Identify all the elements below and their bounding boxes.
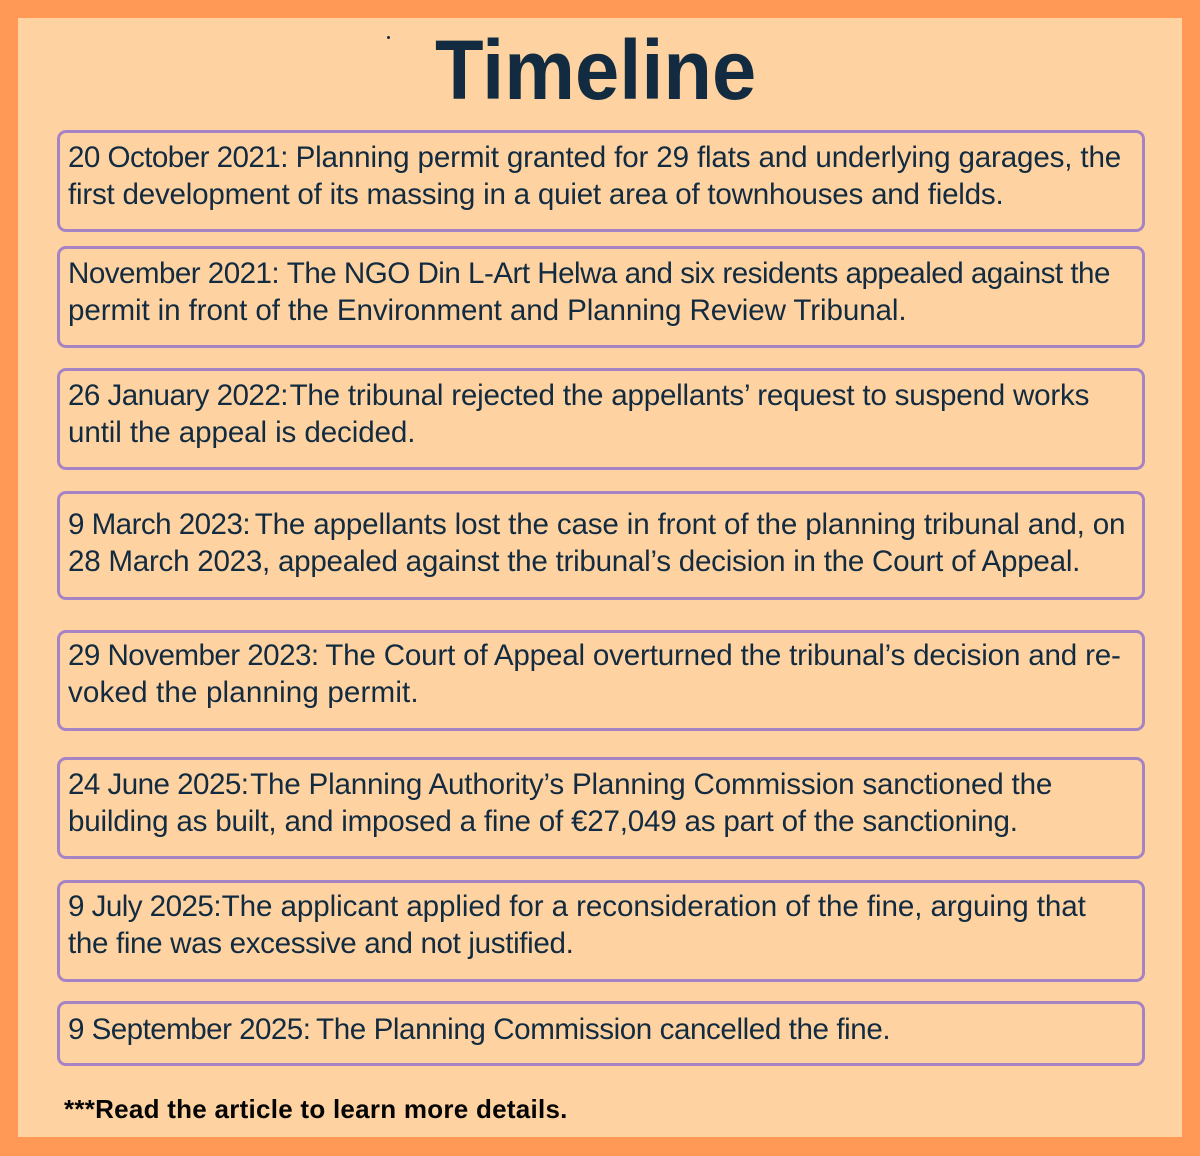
entry text: 9 March 2023: 28 March 2023, appealed against the tribunal’s decision in the Court of Appeal. — [68, 545, 1080, 578]
entry text: 29 November 2023: voked the planning permit. — [68, 676, 419, 709]
entry text: 24 June 2025: building as built, and imposed a fine of €27,049 as part of the sanctioning. — [68, 805, 1018, 838]
entry text: 24 June 2025: 24 June 2025: The Planning Authority’s Planning Commission sanctioned the — [68, 768, 1052, 801]
entry text: 9 July 2025: the fine was excessive and not justified. — [68, 927, 573, 960]
entry text: 9 March 2023 — [68, 508, 1125, 578]
timeline entry box: 20 October 2021 — [57, 130, 1145, 232]
timeline entry box: 9 September 2025 — [57, 1001, 1145, 1066]
entry text: 20 October 2021: 20 October 2021: Planning permit granted for 29 flats and underlying garages, the — [68, 141, 1121, 174]
timeline entry box: 9 July 2025 — [57, 880, 1145, 982]
entry text: 26 January 2022: until the appeal is decided. — [68, 416, 415, 449]
timeline entry box: 9 March 2023 — [57, 491, 1145, 600]
timeline entry box: 29 November 2023 — [57, 630, 1145, 731]
entry text: November 2021 — [68, 257, 1110, 327]
title: Timeline — [435, 23, 756, 117]
entry text: 9 September 2025: 9 September 2025: The Planning Commission cancelled the fine. — [68, 1013, 890, 1046]
entry text: 26 January 2022 — [68, 379, 1089, 449]
timeline entry box: November 2021 — [57, 246, 1145, 348]
entry text: 20 October 2021: first development of its massing in a quiet area of townhouses and fields. — [68, 178, 1003, 211]
entry text: November 2021: November 2021: The NGO Din L-Art Helwa and six residents appealed against the — [68, 257, 1110, 290]
entry text: 9 July 2025: 9 July 2025: The applicant applied for a reconsideration of the fine, arguing that — [68, 890, 1086, 923]
entry text: 29 November 2023: 29 November 2023: The Court of Appeal overturned the tribunal’s decision and re- — [68, 639, 1121, 672]
timeline entry box: 26 January 2022 — [57, 368, 1145, 470]
timeline entry box: 24 June 2025 — [57, 757, 1145, 859]
entry text: 26 January 2022: 26 January 2022: The tribunal rejected the appellants’ request to suspend works — [68, 379, 1089, 412]
entry text: November 2021: permit in front of the Environment and Planning Review Tribunal. — [68, 294, 906, 327]
footnote: ***Read the article to learn more details. — [64, 1094, 568, 1124]
entry text: 9 July 2025 — [68, 890, 1086, 960]
entry text: 9 March 2023: 9 March 2023: The appellants lost the case in front of the planning tribunal and, on — [68, 508, 1125, 541]
entry text: 29 November 2023 — [68, 639, 1121, 709]
entry text: 20 October 2021 — [68, 141, 1121, 211]
decorative speck above title — [387, 36, 390, 39]
entry text: 24 June 2025 — [68, 768, 1052, 838]
